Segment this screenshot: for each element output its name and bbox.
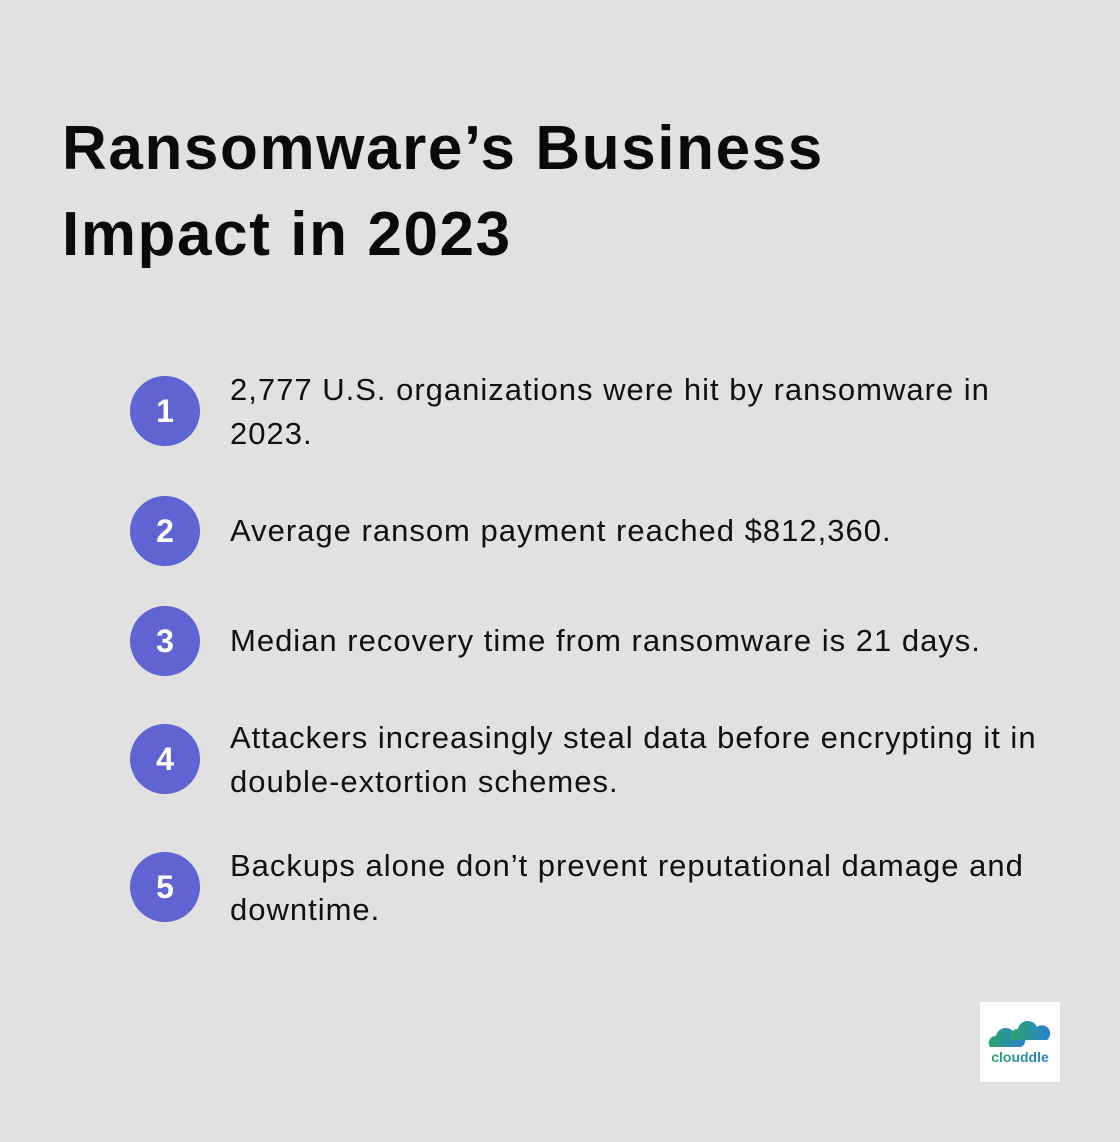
item 4: double-extortion schemes. bbox=[230, 764, 619, 799]
logo: clouddle bbox=[991, 1049, 1049, 1065]
item 2: 2 bbox=[156, 513, 174, 549]
title: Ransomware’s Business bbox=[62, 114, 824, 183]
title bbox=[62, 114, 824, 269]
item 4 bbox=[130, 720, 1037, 799]
item 1: 2,777 U.S. organizations were hit by ransomware in bbox=[230, 372, 990, 407]
item 1: 2023. bbox=[230, 416, 313, 451]
item 5: downtime. bbox=[230, 892, 380, 927]
item 1 bbox=[130, 372, 990, 451]
item 3: 3 bbox=[156, 623, 174, 659]
item 4: 4 bbox=[156, 741, 174, 777]
item 5 bbox=[130, 848, 1024, 927]
item 2 bbox=[130, 496, 892, 566]
logo bbox=[980, 1002, 1060, 1082]
item 1: 1 bbox=[156, 393, 174, 429]
title: Impact in 2023 bbox=[62, 200, 512, 269]
item 3 bbox=[130, 606, 981, 676]
item 4: Attackers increasingly steal data before encrypting it in bbox=[230, 720, 1037, 755]
item 3: Median recovery time from ransomware is 21 days. bbox=[230, 623, 981, 658]
item 2: Average ransom payment reached $812,360. bbox=[230, 513, 892, 548]
item 5: 5 bbox=[156, 869, 174, 905]
item 5: Backups alone don’t prevent reputational damage and bbox=[230, 848, 1024, 883]
